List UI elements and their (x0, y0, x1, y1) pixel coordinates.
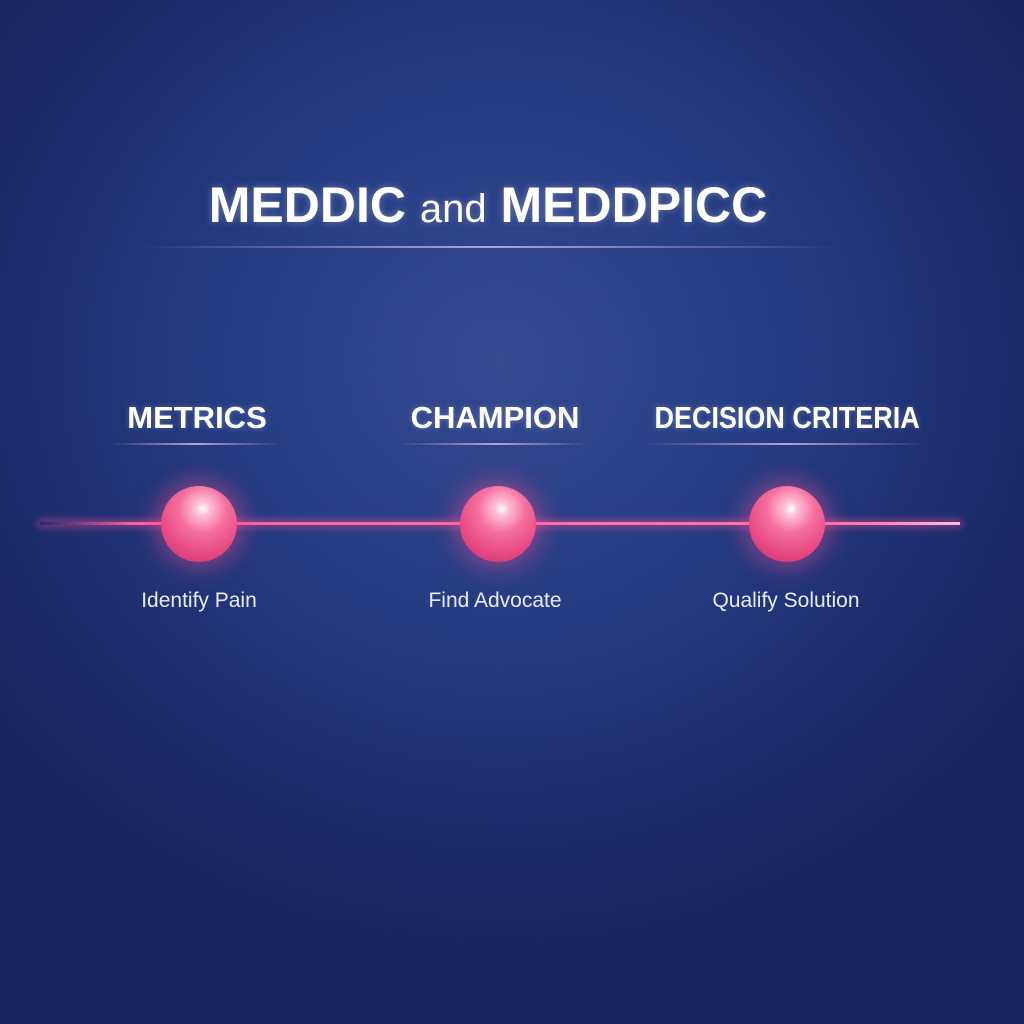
timeline line (40, 522, 960, 525)
heading: decision criteria: DECISION CRITERIA (654, 400, 920, 435)
label: find advocate: Find Advocate (428, 589, 562, 612)
label: qualify solution: Qualify Solution (712, 589, 860, 612)
heading: champion: CHAMPION (411, 400, 579, 435)
node: metrics (161, 486, 237, 562)
title: MEDDIC and MEDDPICC (209, 177, 767, 233)
node: champion (460, 486, 536, 562)
label: identify pain: Identify Pain (141, 589, 257, 612)
heading: metrics: METRICS (127, 400, 267, 435)
node: decision criteria (749, 486, 825, 562)
